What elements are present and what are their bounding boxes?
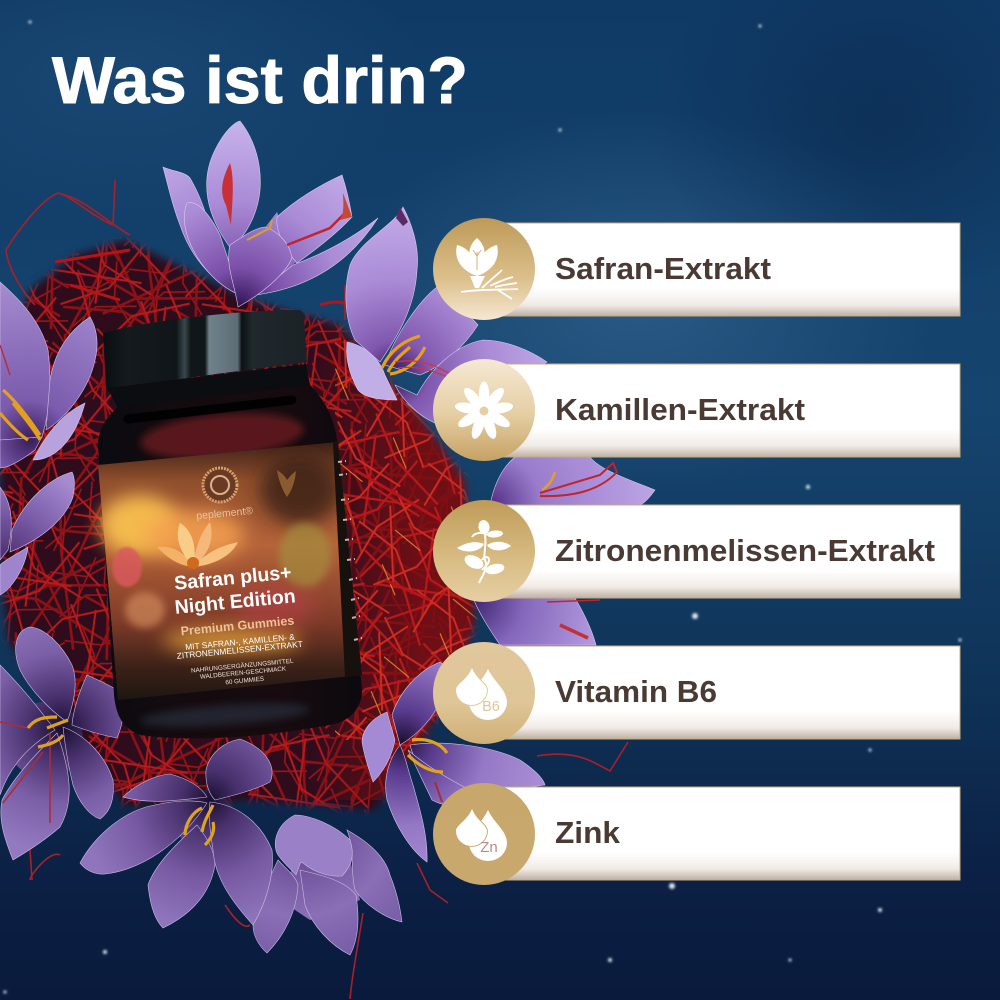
icon text: B6 [482,699,500,715]
label: Safran-Extrakt [555,251,771,286]
product label: 60 GUMMIES [225,676,264,686]
label flower [157,522,238,569]
product label: Night Edition [174,585,297,619]
flower: bottom left [0,627,123,860]
ingredient: Safran-Extrakt [433,218,960,320]
ingredient: Zink [433,783,960,885]
label: Kamillen-Extrakt [555,392,805,427]
product subtitle: Premium Gummies [180,613,295,638]
product details: NAHRUNGSERGÄNZUNGSMITTEL [191,657,294,675]
flower: lower left edge [0,472,74,595]
icon: chamomile flower [433,359,535,461]
flower: upper right [346,207,547,425]
bottle cap [103,310,307,392]
flower: lower right [362,662,545,862]
icon: drops Zn [433,783,535,885]
icon: lemon balm sprig [433,500,535,602]
title: Was ist drin? [52,43,468,117]
supplement bottle [98,310,362,738]
ingredient line: MIT SAFRAN-, KAMILLEN- & [185,631,296,652]
flower: top [163,121,378,307]
product name: Safran plus+ [173,562,292,595]
bar [484,364,960,457]
bottle body [98,375,362,738]
label: Vitamin B6 [555,674,717,709]
flower: bottom [253,815,402,955]
product label: ZITRONENMELISSEN-EXTRAKT [176,639,303,661]
saffron threads nest [0,180,628,999]
icon text: Zn [480,839,498,856]
bar [484,505,960,598]
flower: bottom centre [80,739,273,928]
icon: saffron crocus [433,218,535,320]
label: Zitronenmelissen-Extrakt [555,533,935,568]
product label [98,442,362,700]
product label: WALDBEEREN-GESCHMACK [200,665,287,681]
flower: left [0,282,97,468]
label: Zink [555,815,621,850]
flower: behind bars, lower [473,598,600,645]
brand logo [203,468,237,502]
flower: behind bars, upper [490,457,655,505]
brand name: peplement® [196,505,254,522]
bar [484,223,960,316]
bar [484,646,960,739]
ingredient: Kamillen-Extrakt [433,359,960,461]
bar [484,787,960,880]
ingredient: Vitamin B6 [433,642,960,744]
ingredient: Zitronenmelissen-Extrakt [433,500,960,602]
icon: drops B6 [433,642,535,744]
